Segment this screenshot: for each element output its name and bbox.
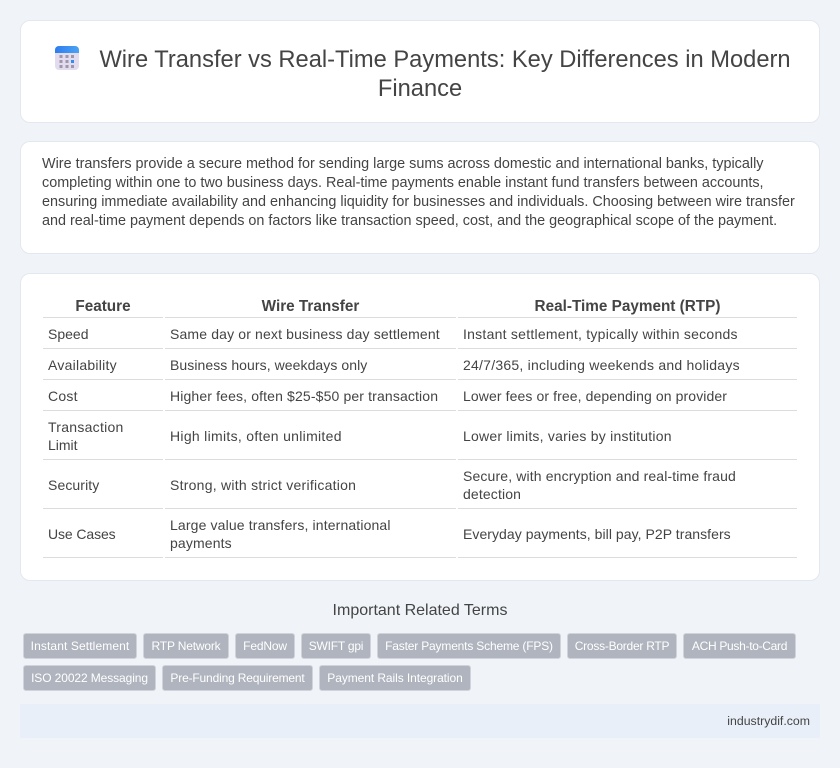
summary text: completing within one to two business days. Real-time payments enable instant fund transfers between accounts,: [42, 175, 764, 191]
panel: comparison table: [20, 273, 820, 581]
summary text: Wire transfers provide a secure method for sending large sums across domestic and international banks, typically: [42, 156, 763, 172]
tag: ISO 20022 Messaging: [31, 671, 148, 685]
summary text: [42, 156, 795, 229]
table header: Wire Transfer: Wire Transfer: [262, 298, 359, 315]
tag: Faster Payments Scheme (FPS): [385, 639, 553, 653]
row: Security: Security: [48, 477, 99, 493]
tag: [567, 633, 677, 659]
summary text: ensuring immediate availability and enhancing liquidity for businesses and individuals. Choosing between wire transfer: [42, 194, 795, 210]
panel: comparison table: 24/7/365, including weekends and holidays: [463, 357, 740, 373]
panel: comparison table: Secure, with encryption and real-time fraud: [463, 468, 736, 484]
row: Transaction Limit: [48, 419, 124, 453]
tag: [23, 665, 156, 691]
tag: Cross-Border RTP: [575, 639, 669, 653]
row: Transaction Limit: Limit: [48, 437, 78, 453]
title: Wire Transfer vs Real-Time Payments: Key Differences in Modern: [99, 47, 791, 73]
panel: comparison table: payments: [170, 535, 232, 551]
panel: title header: [20, 20, 820, 123]
tag: SWIFT gpi: [309, 639, 363, 653]
panel: comparison table: Instant settlement, typically within seconds: [463, 326, 738, 342]
tag: ACH Push-to-Card: [692, 639, 787, 653]
panel: comparison table: High limits, often unlimited: [170, 428, 342, 444]
tag: [301, 633, 371, 659]
footer: [20, 704, 820, 738]
title: Finance: [378, 76, 462, 102]
panel: comparison table: Strong, with strict verification: [170, 477, 356, 493]
tag: [377, 633, 561, 659]
table header: Feature: Feature: [75, 298, 131, 315]
tag: [23, 633, 137, 659]
row: Cost: Cost: [48, 388, 78, 404]
heading: related terms: Important Related Terms: [333, 602, 507, 619]
footer source text: industrydif.com: [727, 714, 810, 728]
panel: comparison table: Everyday payments, bill pay, P2P transfers: [463, 526, 731, 542]
tag: FedNow: [243, 639, 287, 653]
tag: Pre-Funding Requirement: [170, 671, 305, 685]
panel: comparison table: Business hours, weekdays only: [170, 357, 367, 373]
panel: summary paragraph: [20, 141, 820, 254]
panel: comparison table: Same day or next business day settlement: [170, 326, 440, 342]
row: Speed: Speed: [48, 326, 88, 342]
table header: Real-Time Payment: Real-Time Payment (RTP): [535, 298, 720, 315]
tag: Payment Rails Integration: [327, 671, 463, 685]
row: Availability: Availability: [48, 357, 117, 373]
tag: [235, 633, 295, 659]
panel: comparison table: detection: [463, 486, 521, 502]
panel: comparison table: Higher fees, often $25-$50 per transaction: [170, 388, 438, 404]
tag: [162, 665, 313, 691]
tag: [683, 633, 796, 659]
panel: comparison table: Lower fees or free, depending on provider: [463, 388, 727, 404]
tag: Instant Settlement: [31, 639, 129, 653]
tag: RTP Network: [152, 639, 220, 653]
tags: related terms: [23, 633, 796, 691]
tag: [319, 665, 471, 691]
row: Transaction Limit: Transaction: [48, 419, 124, 435]
panel: comparison table: Large value transfers, international: [170, 517, 391, 533]
title: [99, 47, 791, 102]
panel: comparison table: Lower limits, varies by institution: [463, 428, 672, 444]
tag: [143, 633, 229, 659]
icon: calendar: [55, 46, 79, 70]
row: Use Cases: Use Cases: [48, 526, 116, 542]
summary text: and real-time payment depends on factors like transaction speed, cost, and the geographical scope of the payment.: [42, 213, 777, 229]
